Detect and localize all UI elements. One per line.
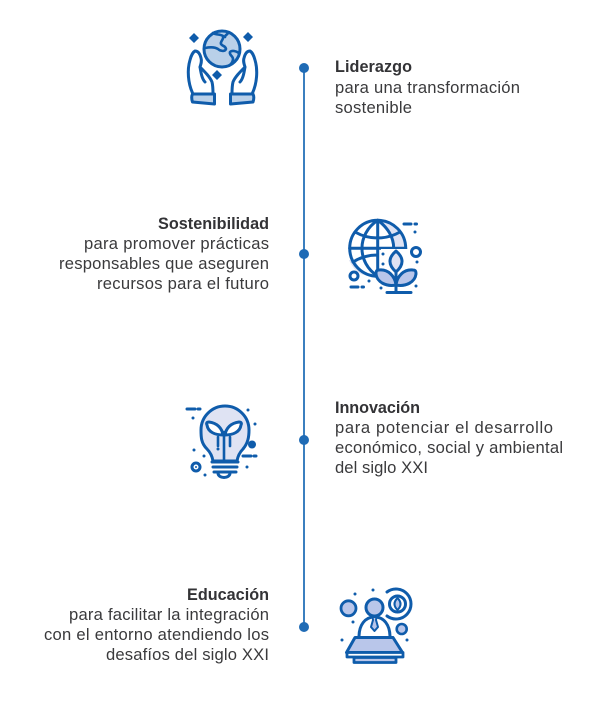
icon: light bulb with sprout	[187, 406, 256, 478]
text: Sostenibilidad: responsables que aseguren	[59, 254, 269, 273]
text: Educación: con el entorno atendiendo los	[44, 625, 269, 644]
text: Innovación	[335, 399, 563, 477]
icon: globe with plant	[349, 220, 420, 295]
text: Educación: Educación	[187, 586, 269, 604]
text: Innovación: económico, social y ambiental	[335, 438, 563, 457]
text: Educación: desafíos del siglo XXI	[106, 645, 269, 664]
text: Sostenibilidad: Sostenibilidad	[158, 215, 269, 233]
text: Liderazgo: Liderazgo	[335, 58, 412, 76]
text: Sostenibilidad: recursos para el futuro	[97, 274, 269, 293]
text: Innovación: Innovación	[335, 399, 420, 417]
timeline	[299, 63, 309, 632]
text: Sostenibilidad: para promover prácticas	[84, 234, 269, 253]
text: Liderazgo	[335, 58, 520, 117]
text: Innovación: del siglo XXI	[335, 458, 428, 477]
text: Liderazgo: para una transformación	[335, 78, 520, 97]
text: Sostenibilidad	[59, 215, 269, 293]
text: Liderazgo: sostenible	[335, 98, 412, 117]
text: Educación	[44, 586, 269, 664]
text: Educación: para facilitar la integración	[69, 605, 269, 624]
icon: hands holding globe	[188, 31, 257, 104]
text: Innovación: para potenciar el desarrollo	[335, 418, 553, 437]
icon: speaker at podium	[340, 588, 411, 662]
